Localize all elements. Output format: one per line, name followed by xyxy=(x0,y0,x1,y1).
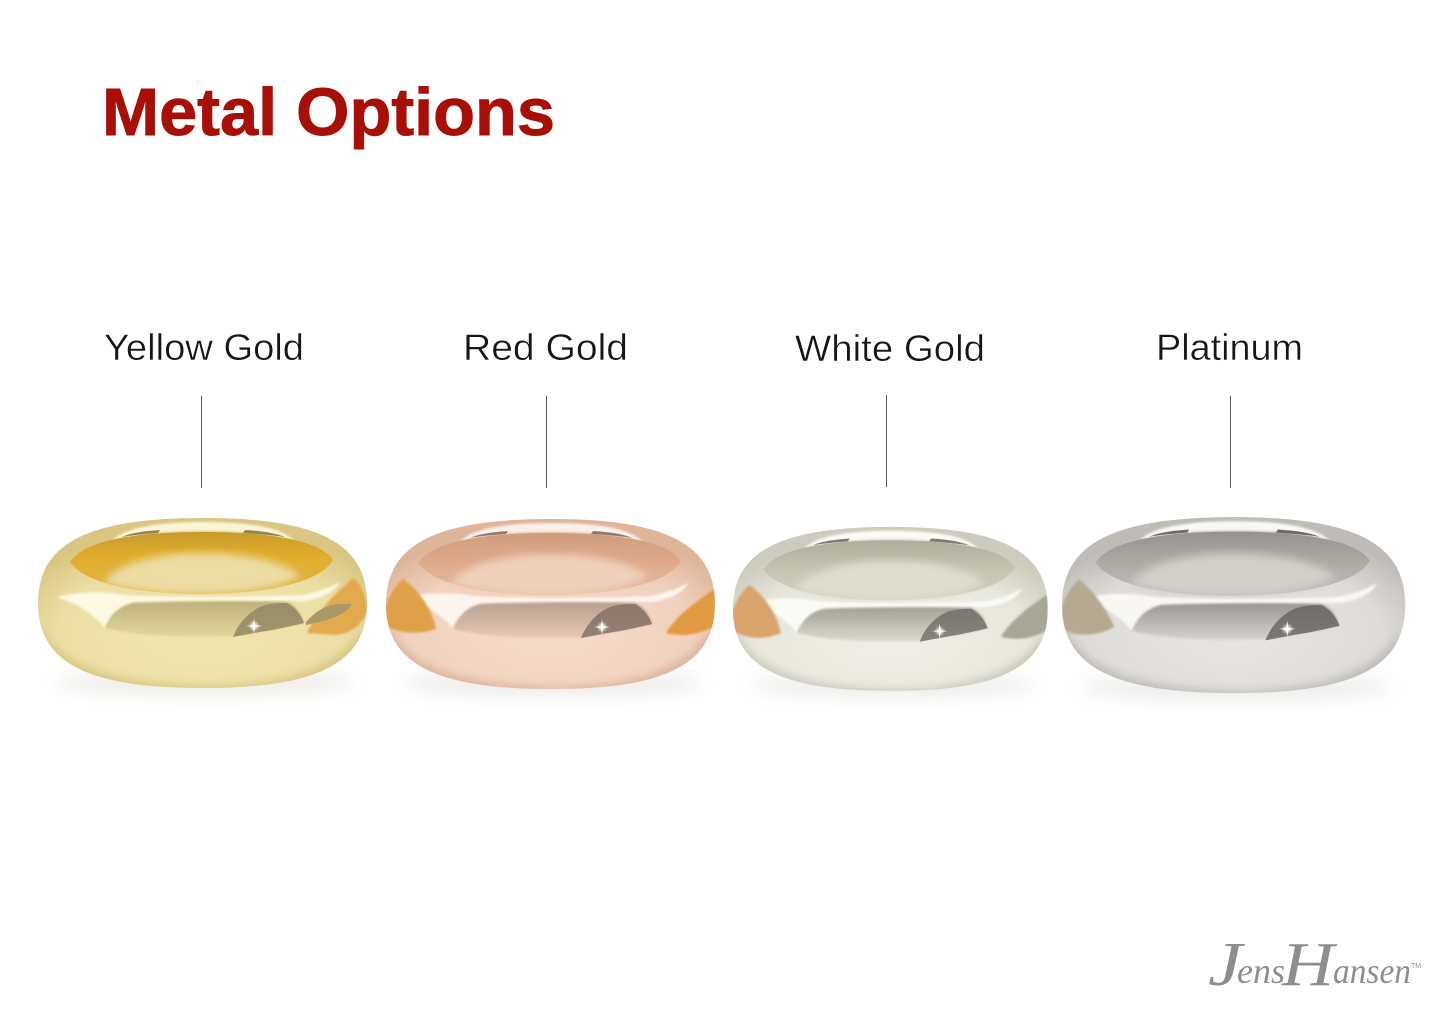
logo: Jens Hansen: H xyxy=(1281,931,1338,999)
sparkle xyxy=(1279,621,1296,637)
ring: red gold xyxy=(384,519,715,696)
metal label: Red Gold: Red Gold xyxy=(463,326,628,368)
metal label: Platinum: Platinum xyxy=(1156,326,1303,368)
sparkle xyxy=(246,618,262,634)
leader line: Platinum xyxy=(1230,396,1232,488)
ring: white gold xyxy=(731,527,1048,698)
leader line: Red Gold xyxy=(546,396,548,488)
logo: Jens Hansen: J xyxy=(1208,931,1245,999)
leader line: White Gold xyxy=(886,395,888,487)
sparkle xyxy=(932,623,947,639)
metal label: Yellow Gold: Yellow Gold xyxy=(104,326,304,368)
title: Metal Options xyxy=(102,75,555,150)
logo: Jens Hansen: ansen xyxy=(1333,951,1411,991)
sparkle xyxy=(594,619,610,635)
ring: platinum xyxy=(1060,517,1405,700)
logo: Jens Hansen: TM xyxy=(1411,963,1421,970)
logo: Jens Hansen: ens xyxy=(1237,951,1285,991)
ring: yellow gold xyxy=(38,518,367,695)
logo: Jens Hansen xyxy=(1208,931,1421,999)
metal label: White Gold: White Gold xyxy=(795,327,985,369)
leader line: Yellow Gold xyxy=(200,396,202,488)
